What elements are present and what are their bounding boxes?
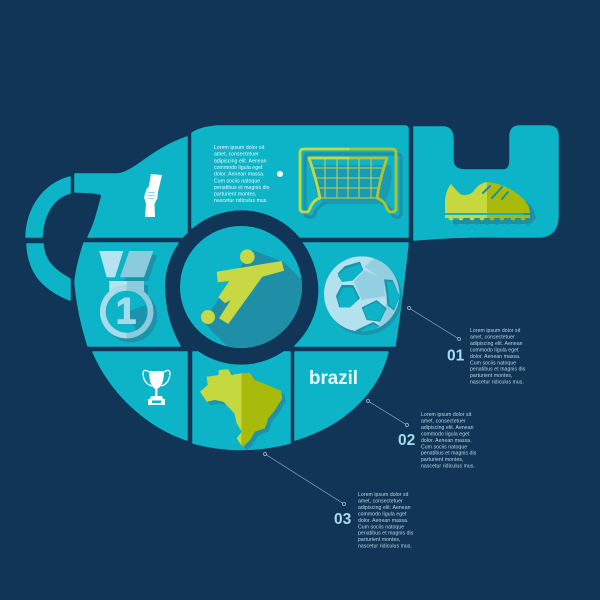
text block: top panel: penatibus et magnis dis <box>214 185 270 191</box>
text block: top panel: Lorem ipsum dolor sit <box>214 145 265 151</box>
text block 01: Cum sociis natoque <box>470 360 516 366</box>
panel: shoe <box>414 126 558 240</box>
text block 03: adipiscing elit. Aenean <box>358 505 411 511</box>
number 02: 02 <box>398 432 415 449</box>
text block 01: dolor. Aenean massa. <box>470 354 521 360</box>
text block 02: amet, consectetuer <box>421 418 466 424</box>
icon: soccer ball <box>324 256 403 335</box>
text block: top panel: parturient montes, <box>214 192 256 198</box>
text block 02: commodo ligula eget <box>421 431 470 437</box>
text block: top panel: nascetur ridiculus mus. <box>214 198 268 204</box>
icon: footballer <box>201 249 284 324</box>
text block: top panel: amet, consectetuer <box>214 152 259 158</box>
text block 02: penatibus et magnis dis <box>421 451 477 457</box>
text block 01: commodo ligula eget <box>470 347 519 353</box>
label: brazil: brazil <box>309 368 358 389</box>
panel: brazil map <box>193 352 290 450</box>
leader line 01 <box>408 306 460 340</box>
icon: brazil map <box>200 369 286 450</box>
text block 02: dolor. Aenean massa. <box>421 438 472 444</box>
callout 02 <box>366 400 477 470</box>
panel: whistle handle top <box>26 177 70 237</box>
callout 03 <box>264 452 414 550</box>
text block: top panel: dolor. Aenean massa. <box>214 172 265 178</box>
text block 02: nascetur ridiculus mus. <box>421 464 475 470</box>
number 01: 01 <box>447 348 465 364</box>
text block 02: parturient montes, <box>421 457 464 463</box>
icon: hand holding card <box>144 174 162 217</box>
text block: top panel: adipiscing elit. Aenean <box>214 158 267 164</box>
panel: whistle handle bottom <box>27 244 70 300</box>
text block 03: Cum sociis natoque <box>358 524 404 530</box>
text block 01: nascetur ridiculus mus. <box>470 380 524 386</box>
text block 03: nascetur ridiculus mus. <box>358 544 412 550</box>
icon: medal: 1 <box>116 290 136 332</box>
text block 03: parturient montes, <box>358 537 400 543</box>
text block: top panel: commodo ligula eget <box>214 165 263 171</box>
panel: player circle <box>180 226 302 348</box>
text block 03: Lorem ipsum dolor sit <box>358 492 409 498</box>
text block 03: commodo ligula eget <box>358 511 407 517</box>
icon: goal <box>300 149 401 217</box>
text block 01: penatibus et magnis dis <box>470 367 526 373</box>
white dot <box>277 171 283 177</box>
text block 02: Cum sociis natoque <box>421 444 467 450</box>
panel: football <box>295 243 408 346</box>
panel: goal and text <box>192 126 408 237</box>
text block 03: dolor. Aenean massa. <box>358 518 409 524</box>
panel: brazil label <box>295 352 388 440</box>
text block 01: parturient montes, <box>470 373 512 379</box>
player long shadow <box>203 250 302 348</box>
text block 01: adipiscing elit. Aenean <box>470 341 523 347</box>
callout 01 <box>408 306 526 386</box>
leader line 03 <box>264 452 346 506</box>
leader line 02 <box>366 400 408 426</box>
panel: medal <box>75 243 180 346</box>
panel: trophy <box>93 352 187 440</box>
text block 02: Lorem ipsum dolor sit <box>421 412 472 418</box>
text block 03: penatibus et magnis dis <box>358 531 414 537</box>
panel: referee card <box>75 137 187 237</box>
number 03: 03 <box>334 511 352 528</box>
text block: top panel: Cum sociis natoque <box>214 178 260 184</box>
text block 03: amet, consectetuer <box>358 498 403 504</box>
ring around centre circle <box>165 211 317 363</box>
icon: trophy <box>143 370 170 405</box>
text block 02: adipiscing elit. Aenean <box>421 425 474 431</box>
icon: football boot <box>445 182 536 225</box>
text block 01: amet, consectetuer <box>470 334 515 340</box>
text block 01: Lorem ipsum dolor sit <box>470 328 521 334</box>
